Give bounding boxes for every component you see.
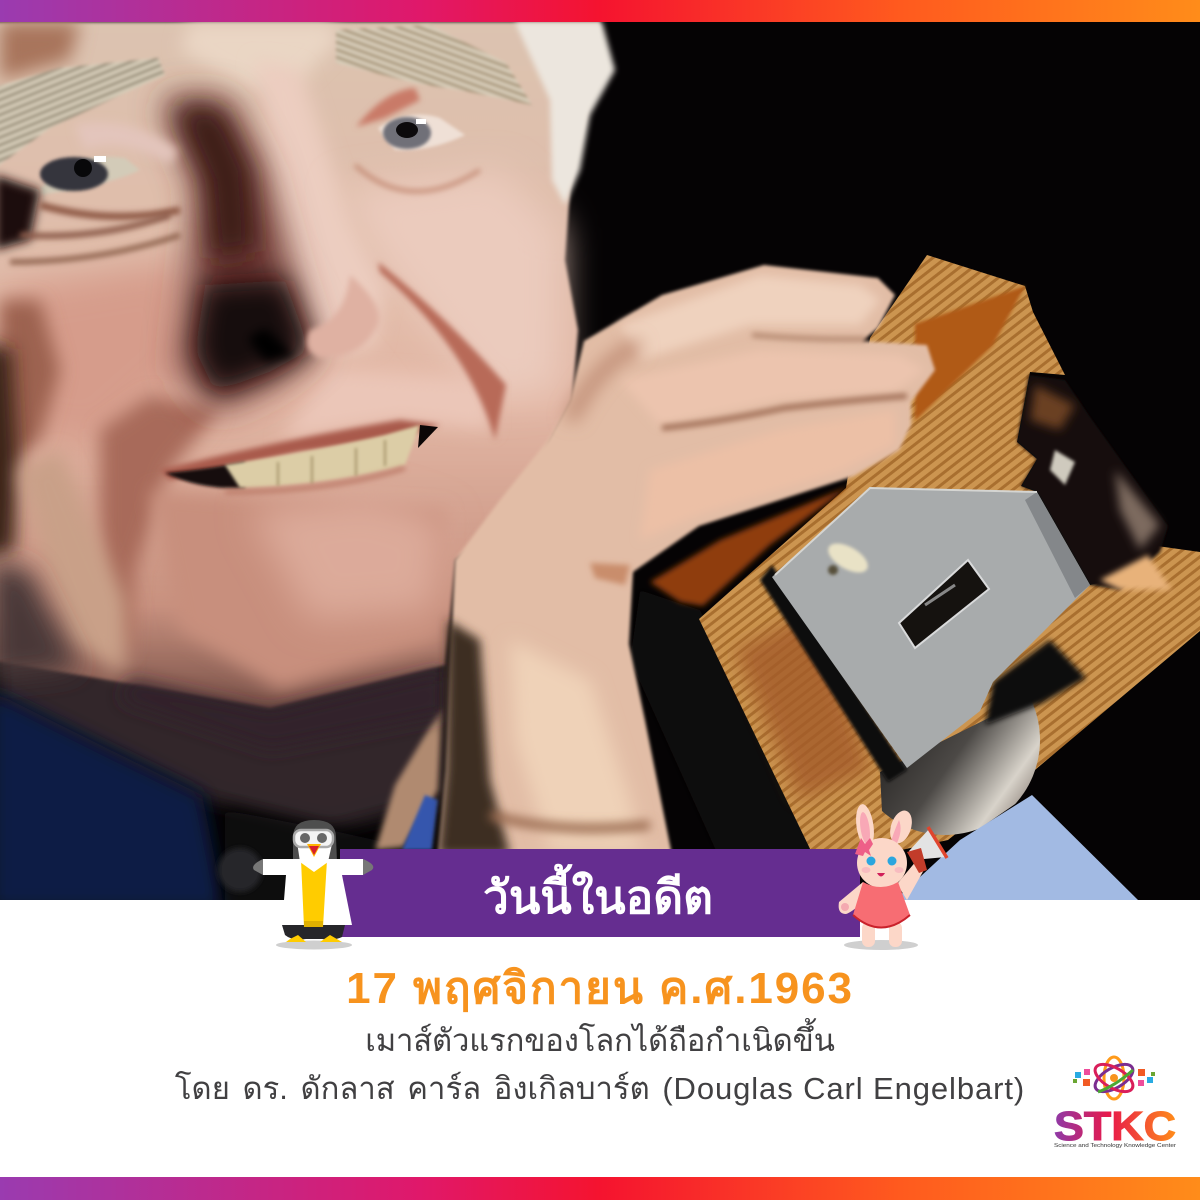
slot	[899, 560, 989, 648]
wooden mouse	[630, 255, 1200, 860]
photo: Douglas Engelbart holding the first mouse	[0, 22, 1200, 900]
white hair	[515, 22, 615, 205]
date heading: 17 พฤศจิกายน ค.ศ.1963	[346, 964, 854, 1013]
upper wheel	[1017, 375, 1168, 590]
hand	[438, 265, 935, 855]
neck and clothes	[0, 650, 450, 910]
right eye	[355, 88, 480, 191]
bottom gradient bar	[0, 1177, 1200, 1200]
forehead tone	[0, 22, 80, 80]
rabbit mascot	[838, 804, 948, 950]
STKC wordmark: STKC	[1054, 1103, 1176, 1149]
cheek shading	[0, 260, 190, 450]
atom icon	[1073, 1057, 1155, 1099]
under right eye cheek	[340, 170, 560, 400]
blue shirt	[895, 795, 1138, 900]
banner	[340, 849, 860, 937]
lower wheel	[880, 704, 1040, 835]
metal plate	[760, 565, 907, 782]
description line 2: โดย ดร. ดักลาส คาร์ล อิงเกิลบาร์ต (Douglas Carl Engelbart)	[175, 1071, 1025, 1106]
penguin mascot	[253, 820, 374, 950]
nub	[826, 542, 870, 574]
left eye	[0, 123, 180, 262]
left eyebrow	[0, 58, 165, 168]
banner title: วันนี้ในอดีต	[483, 871, 713, 923]
top gradient bar	[0, 0, 1200, 22]
logo tagline: Science and Technology Knowledge Center	[1054, 1143, 1176, 1149]
nasolabial fold	[378, 262, 506, 440]
face	[0, 22, 615, 750]
right eyebrow	[336, 25, 532, 105]
mouth	[160, 420, 440, 492]
nose tip	[307, 275, 379, 358]
nose highlight	[262, 82, 386, 352]
eye socket and nose shadow	[165, 100, 315, 410]
STKC logo	[1054, 1056, 1176, 1149]
description line 1: เมาส์ตัวแรกของโลกได้ถือกำเนิดขึ้น	[365, 1023, 835, 1058]
